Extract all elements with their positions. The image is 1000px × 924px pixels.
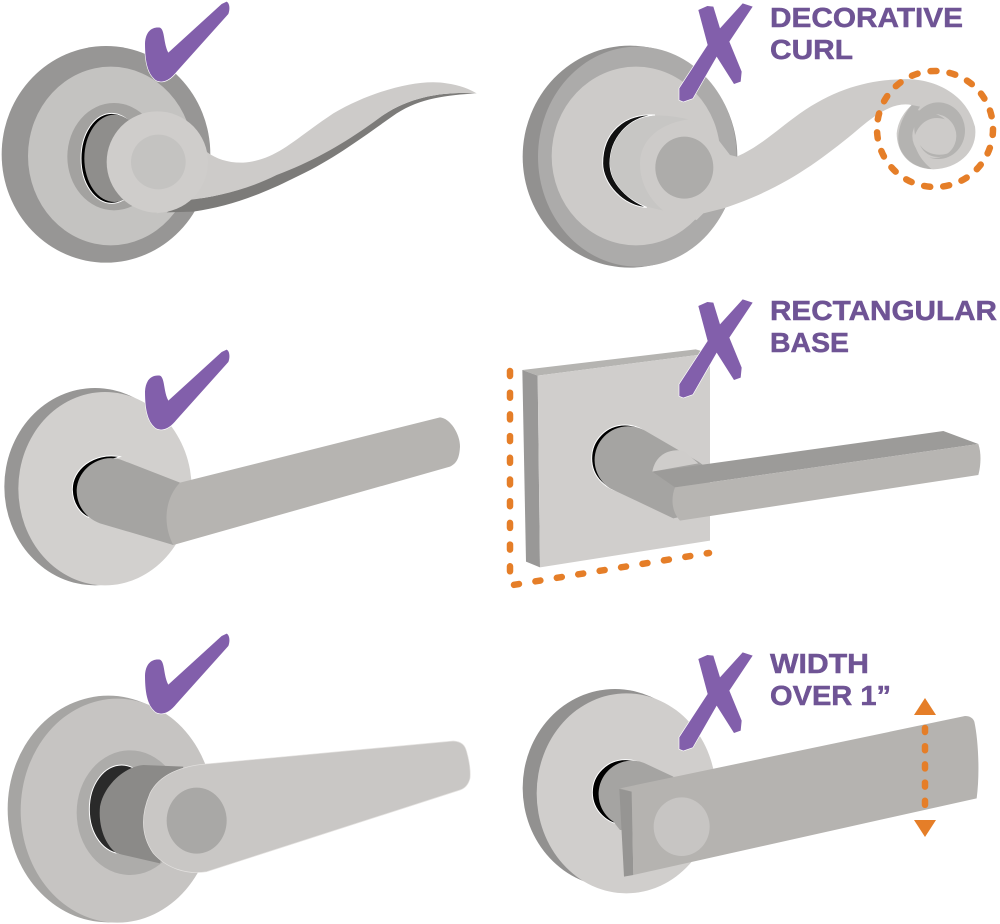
lever illustration: slim wave lever bbox=[2, 46, 477, 263]
icon: purple X bbox=[679, 652, 753, 751]
icon: purple check mark bbox=[145, 634, 229, 714]
lever illustration: square rose lever bbox=[522, 349, 980, 567]
label: rectangular base: BASE bbox=[770, 327, 849, 358]
label: rectangular base bbox=[770, 295, 997, 358]
lever illustration: tapered lever bbox=[8, 696, 470, 923]
panel: approved tapered lever, bottom left bbox=[8, 634, 470, 923]
label: width over 1 inch bbox=[770, 648, 891, 711]
panel: rejected rectangular base lever, middle right bbox=[510, 295, 997, 585]
panel: rejected wide lever, bottom right bbox=[523, 648, 978, 893]
icon: purple check mark bbox=[145, 2, 229, 82]
panel: approved straight lever, middle left bbox=[4, 350, 460, 585]
lever illustration: scroll lever bbox=[523, 46, 975, 268]
label: width over 1 inch: WIDTH bbox=[770, 648, 869, 679]
lever illustration: wide flat lever bbox=[523, 689, 978, 893]
panel: rejected decorative curl lever, top right bbox=[523, 2, 993, 268]
label: decorative curl bbox=[770, 2, 963, 65]
panel: approved curved lever, top left bbox=[2, 2, 477, 263]
label: rectangular base: RECTANGULAR bbox=[770, 295, 997, 326]
label: decorative curl: DECORATIVE bbox=[770, 2, 963, 33]
icon: purple X bbox=[679, 299, 753, 398]
icon: purple X bbox=[679, 3, 753, 102]
callout: double-headed width arrow bbox=[914, 698, 936, 837]
callout: dashed circle around curl bbox=[877, 71, 993, 187]
callout: dashed corner line around base bbox=[510, 371, 709, 585]
lever illustration: round bar lever bbox=[4, 388, 460, 585]
icon: purple check mark bbox=[145, 350, 229, 430]
label: decorative curl: CURL bbox=[770, 34, 853, 65]
label: width over 1 inch: OVER 1” bbox=[770, 680, 891, 711]
